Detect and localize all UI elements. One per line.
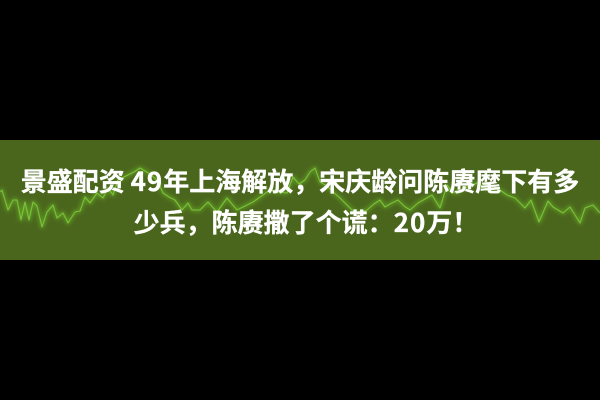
title xyxy=(21,162,579,240)
title: 少兵，陈赓撒了个谎：20万！ xyxy=(134,203,478,240)
title: 景盛配资 49年上海解放，宋庆龄问陈赓麾下有多 xyxy=(21,162,579,199)
panel: green banner xyxy=(0,140,600,260)
